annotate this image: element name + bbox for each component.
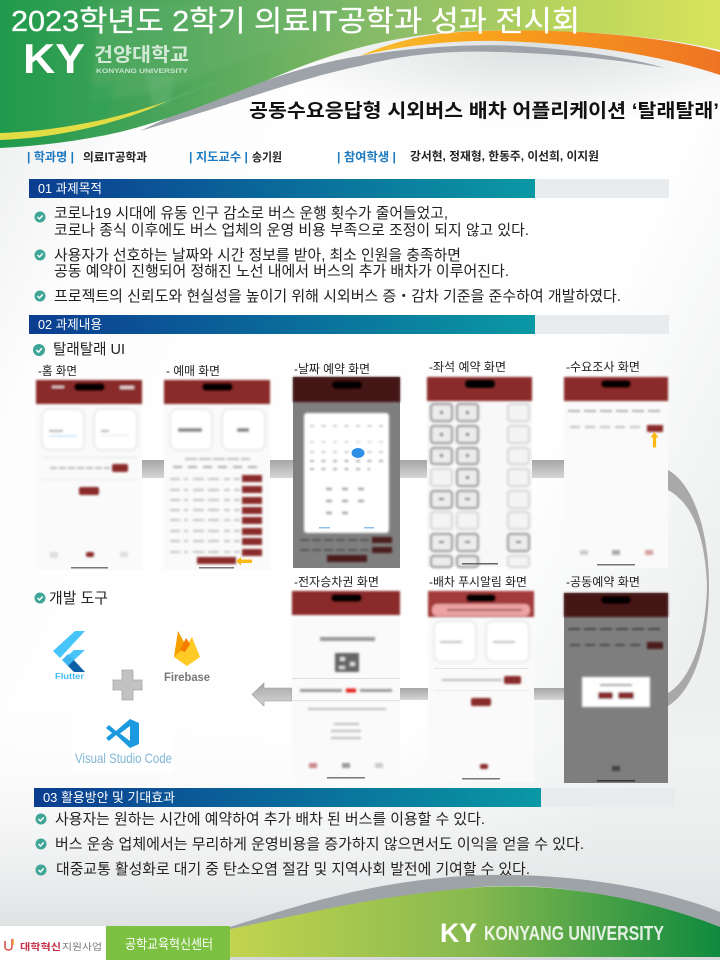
screen labels: -홈 화면: [38, 364, 77, 378]
icon: Firebase: [164, 631, 210, 684]
text block: outcomes: 사용자는 원하는 시간에 예약하여 추가 배차 된 버스를 이용할 수 있다.: [55, 811, 485, 828]
info row: | 참여학생 |: [337, 149, 396, 164]
left arrow: [252, 683, 292, 706]
footer badge: 공학교육혁신센터: [125, 937, 213, 952]
text block: purpose: 사용자가 선호하는 날짜와 시간 정보를 받아, 최소 인원을 충족하면: [54, 247, 461, 264]
icon: check: [36, 838, 46, 850]
logo: Konyang University: 건양대학교: [94, 44, 189, 66]
subheading: tools: 개발 도구: [49, 590, 108, 607]
text block: outcomes: 대중교통 활성화로 대기 중 탄소오염 절감 및 지역사회 발전에 기여할 수 있다.: [56, 861, 530, 878]
text block: purpose: [34, 205, 621, 305]
section heading 02: [29, 315, 669, 334]
icon: plus: [113, 670, 142, 700]
icon: Firebase: Firebase: [164, 670, 210, 684]
subtitle: 공동수요응답형 시외버스 배차 어플리케이션 ‘탈래탈래’: [249, 100, 719, 122]
logo: Konyang University: KY: [23, 35, 85, 82]
screen labels: -수요조사 화면: [566, 360, 640, 374]
logo: Konyang University footer: KY: [440, 918, 477, 948]
icon: check: [34, 290, 46, 302]
info row: | 학과명 |: [27, 149, 74, 164]
screen: e-ticket: [292, 591, 400, 780]
info row: [27, 149, 599, 164]
footer badge: [106, 926, 230, 960]
info row: 강서현, 정재형, 한동주, 이선희, 이지원: [410, 149, 599, 163]
logo: university innovation: 지원사업: [62, 942, 102, 952]
curved arrow: [668, 470, 709, 706]
screen: home: [36, 380, 142, 570]
logo: Konyang University footer: [440, 918, 665, 948]
screen labels: -날짜 예약 화면: [294, 361, 370, 376]
footer swoosh: [0, 875, 720, 960]
section heading 01: [29, 179, 669, 198]
header swoosh banner: [0, 0, 720, 148]
text block: purpose: 공동 예약이 진행되어 정해진 노선 내에서 버스의 추가 배차가 이루어진다.: [54, 263, 509, 280]
logo: Konyang University: KONYANG UNIVERSITY: [96, 68, 189, 75]
screen labels: -좌석 예약 화면: [429, 359, 506, 374]
section heading 03: [34, 788, 675, 807]
text block: outcomes: 버스 운송 업체에서는 무리하게 운영비용을 증가하지 않으면서도 이익을 얻을 수 있다.: [55, 836, 584, 853]
subheading: UI: 탈래탈래 UI: [53, 341, 125, 358]
screen: group reservation: [564, 593, 668, 783]
icon: check: [36, 814, 46, 824]
screen labels: -전자승차권 화면: [294, 575, 379, 589]
info row: 송기원: [252, 150, 282, 164]
screen: date picker: [293, 377, 400, 568]
icon: check: [34, 250, 46, 260]
arrow: yellow: [236, 557, 252, 566]
icon: Flutter: [53, 631, 85, 681]
icon: check: [36, 864, 46, 876]
info row: 의료IT공학과: [83, 150, 147, 164]
info row: | 지도교수 |: [189, 150, 248, 164]
screen labels: - 예매 화면: [166, 364, 220, 378]
icon: Visual Studio Code: Visual Studio Code: [75, 750, 172, 766]
text block: purpose: 프로젝트의 신뢰도와 현실성을 높이기 위해 시외버스 증・감차 기준을 준수하여 개발하였다.: [54, 288, 621, 305]
logo: university innovation: 대학혁신: [20, 941, 61, 952]
screen: demand survey: [564, 377, 668, 568]
screen labels: -공동예약 화면: [566, 574, 640, 589]
logo: Konyang University: [23, 35, 189, 82]
arrow: yellow up: [650, 432, 658, 448]
icon: Visual Studio Code: [72, 710, 173, 773]
screen labels: -배차 푸시알림 화면: [429, 575, 527, 589]
icon: check: [34, 212, 46, 222]
section heading 03: 03 활용방안 및 기대효과: [43, 790, 175, 805]
screen: seats: [427, 377, 532, 567]
text block: purpose: 코로나19 시대에 유동 인구 감소로 버스 운행 횟수가 줄어들었고,: [54, 205, 448, 222]
section heading 02: 02 과제내용: [38, 317, 102, 332]
logo: Konyang University footer: KONYANG UNIVERSITY: [484, 923, 665, 945]
logo: university innovation: [5, 939, 102, 952]
icon: Flutter: Flutter: [55, 671, 85, 681]
connector arrows: [142, 460, 564, 700]
screen: booking: [164, 380, 270, 570]
screen: push notification: [428, 591, 534, 782]
section heading 01: 01 과제목적: [38, 181, 102, 196]
title: 2023학년도 2학기 의료IT공학과 성과 전시회: [11, 5, 580, 38]
screen labels: [38, 359, 640, 589]
text block: outcomes: [36, 811, 584, 878]
text block: purpose: 코로나 종식 이후에도 버스 업체의 운영 비용 부족으로 조정이 되지 않고 있다.: [54, 222, 529, 239]
